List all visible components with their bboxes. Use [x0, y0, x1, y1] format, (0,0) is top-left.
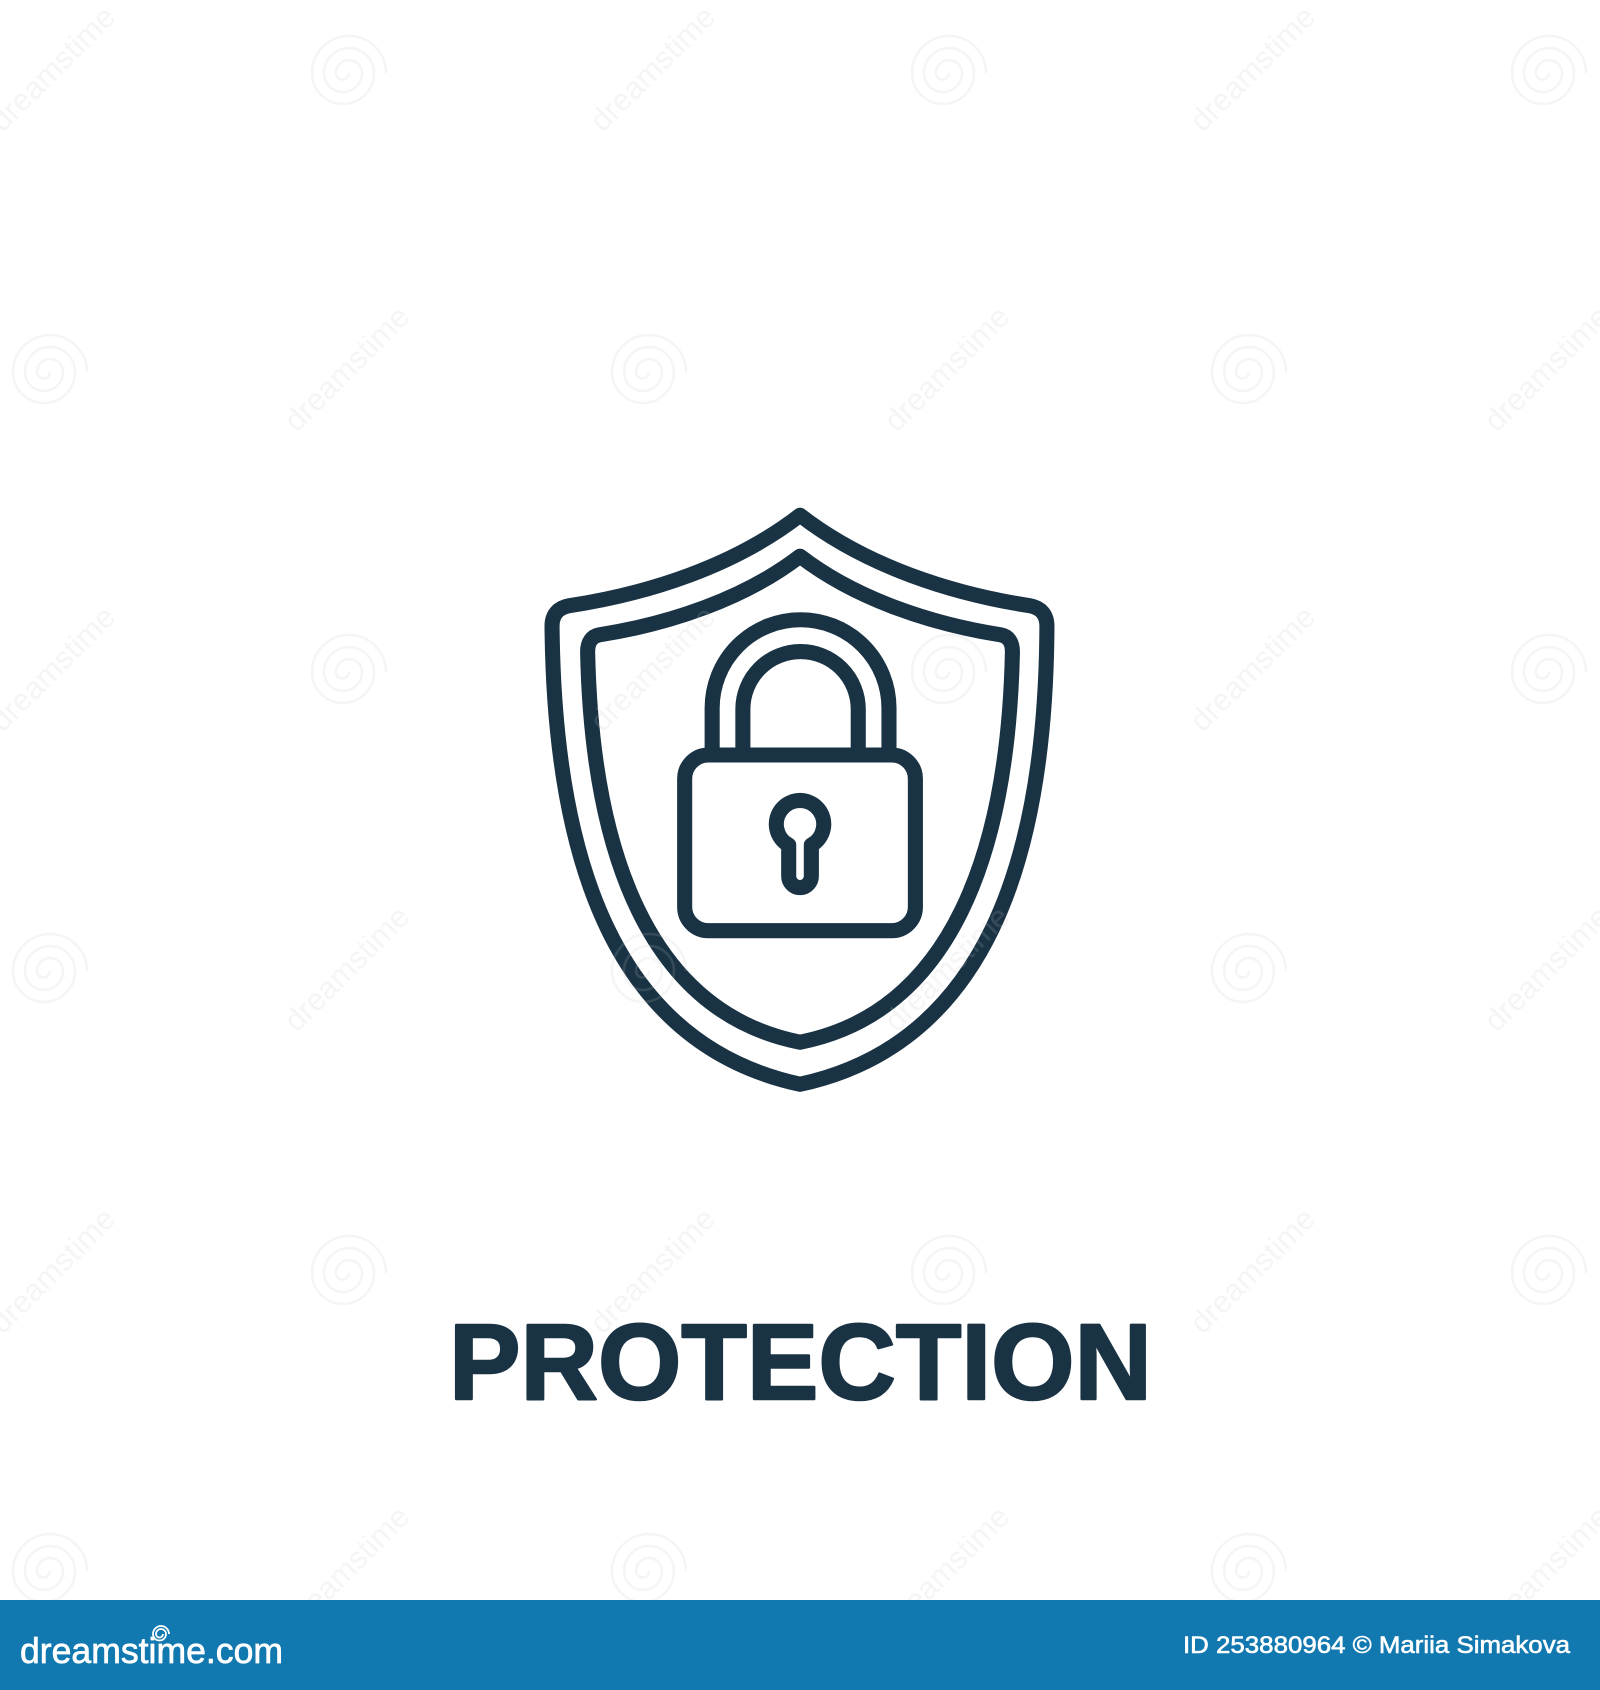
footer logo text: dreamstime.com: [20, 1630, 283, 1671]
watermark pattern: dreamstime: [1183, 0, 1322, 138]
icon: keyhole: [776, 800, 824, 888]
title: PROTECTION: [449, 1301, 1152, 1422]
icon: outer shield outline: [552, 515, 1047, 1084]
watermark pattern: dreamstime: [277, 1499, 416, 1638]
icon: padlock inner shackle: [743, 652, 858, 751]
watermark pattern: dreamstime: [1183, 1201, 1322, 1340]
watermark pattern: dreamstime: [277, 299, 416, 438]
watermark pattern: dreamstime: [583, 599, 722, 738]
watermark pattern: dreamstime: [583, 0, 722, 138]
watermark pattern: dreamstime: [877, 1499, 1016, 1638]
icon: padlock outer shackle: [712, 620, 889, 751]
footer credit: ID 253880964 © Mariia Simakova: [1183, 1632, 1571, 1659]
watermark pattern: dreamstime: [877, 299, 1016, 438]
icon: inner shield outline: [588, 556, 1012, 1042]
watermark pattern: dreamstime: [1183, 599, 1322, 738]
icon: shield with padlock: [552, 515, 1047, 1084]
watermark pattern: dreamstime: [277, 899, 416, 1038]
icon: padlock body: [685, 755, 915, 931]
footer band: [0, 1600, 1600, 1690]
watermark pattern: dreamstime: [877, 899, 1016, 1038]
watermark pattern: dreamstime: [583, 1201, 722, 1340]
footer logo spiral: [153, 1626, 169, 1640]
